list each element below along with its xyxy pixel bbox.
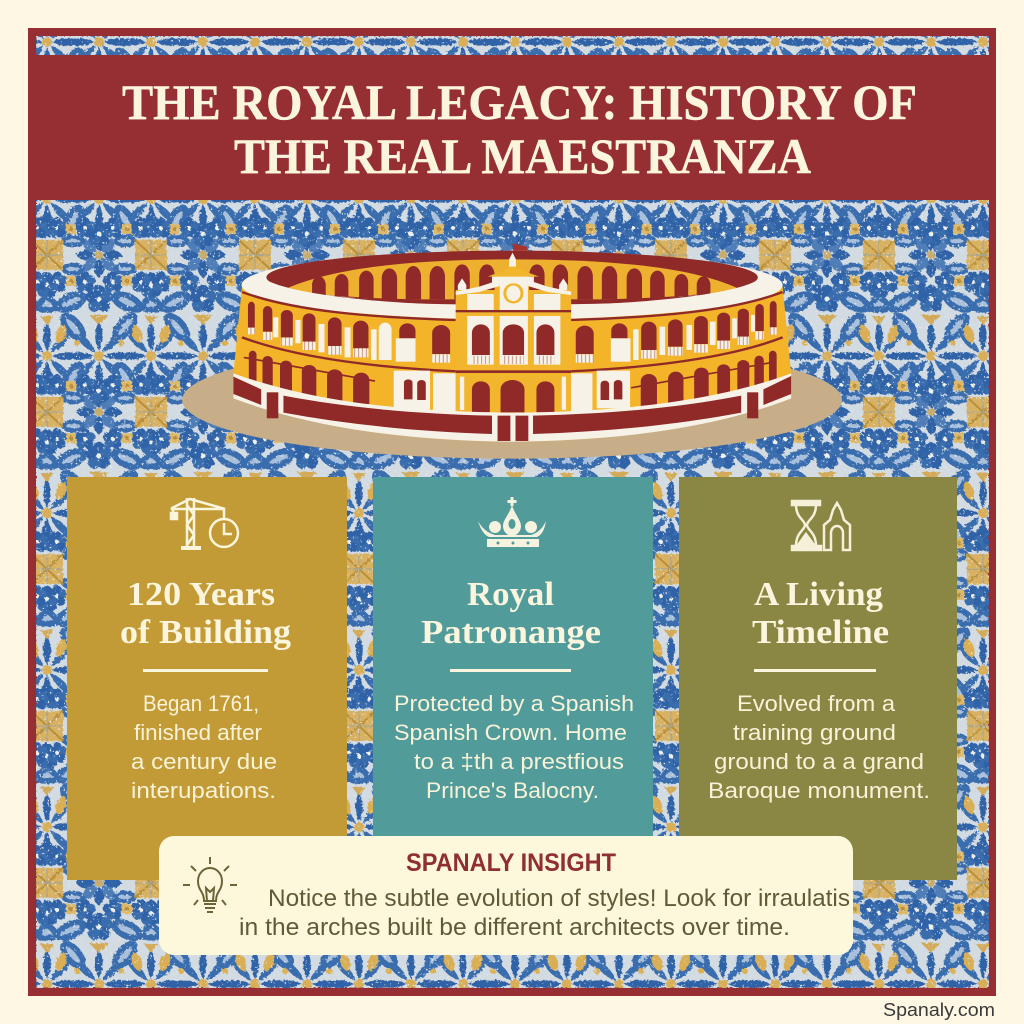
flag — [513, 243, 528, 260]
top rim — [242, 251, 783, 319]
upper arcade left — [248, 302, 450, 354]
body text: Baroque monument. — [708, 778, 930, 803]
body text: a century due — [131, 749, 277, 774]
title: THE ROYAL LEGACY: HISTORY OF — [122, 74, 917, 130]
icon: crane and clock — [171, 498, 238, 548]
heading: SPANALY INSIGHT — [406, 849, 616, 877]
white details — [273, 315, 755, 362]
base wall — [233, 373, 791, 442]
insight text: Notice the subtle evolution of styles! Look for irraulatis — [268, 885, 850, 912]
body text: Evolved from a — [737, 691, 896, 716]
body text: ground to a a grand — [714, 749, 924, 774]
body text — [708, 691, 930, 803]
heading: of Building — [120, 614, 291, 651]
body text — [131, 691, 277, 803]
heading: Royal — [467, 576, 554, 613]
lower arcade right — [631, 351, 777, 407]
white rim front — [242, 280, 456, 313]
panel: Royal Patronange — [373, 477, 653, 842]
heading: A Living — [754, 576, 883, 613]
panel: 120 Years of Building — [67, 477, 347, 880]
inner seating — [266, 251, 758, 304]
divider — [450, 669, 571, 672]
body text: interupations. — [131, 778, 276, 803]
icon: hourglass and arch — [792, 501, 850, 550]
heading — [421, 576, 601, 651]
heading — [120, 576, 291, 651]
body text — [394, 691, 634, 803]
body text: Spanish Crown. Home — [394, 720, 627, 745]
balustrades — [248, 327, 777, 363]
icon: lightbulb — [183, 857, 237, 912]
body text: Protected by a Spanish — [394, 691, 634, 716]
icon: crown — [478, 497, 546, 547]
heading — [752, 576, 889, 651]
title — [122, 74, 917, 184]
heading: Timeline — [752, 614, 889, 651]
cornice bands — [242, 292, 783, 371]
callout: Spanaly Insight — [159, 836, 853, 955]
heading: 120 Years — [127, 576, 275, 613]
footer: brand: Spanaly.com — [883, 1000, 995, 1020]
outer wall — [233, 287, 791, 442]
divider — [143, 669, 268, 672]
upper arcade right — [576, 301, 777, 354]
body text: training ground — [733, 720, 896, 745]
body text: to a ‡th a prestfious — [414, 749, 624, 774]
heading: Patronange — [421, 614, 601, 651]
insight text: in the arches built be different architects over time. — [239, 914, 790, 941]
divider — [754, 669, 876, 672]
title banner — [28, 55, 996, 200]
insight text — [239, 885, 850, 941]
central facade — [456, 253, 571, 413]
body text: Began 1761, — [143, 691, 259, 716]
white side blocks with windows — [394, 371, 630, 412]
lower arcade left — [244, 351, 375, 404]
sand ground — [182, 341, 842, 459]
illustration: bullring — [182, 243, 842, 459]
title: THE REAL MAESTRANZA — [234, 128, 811, 184]
panel: A Living Timeline — [679, 477, 957, 880]
body text: finished after — [134, 720, 262, 745]
inner arches — [312, 264, 710, 299]
body text: Prince's Balocny. — [426, 778, 599, 803]
